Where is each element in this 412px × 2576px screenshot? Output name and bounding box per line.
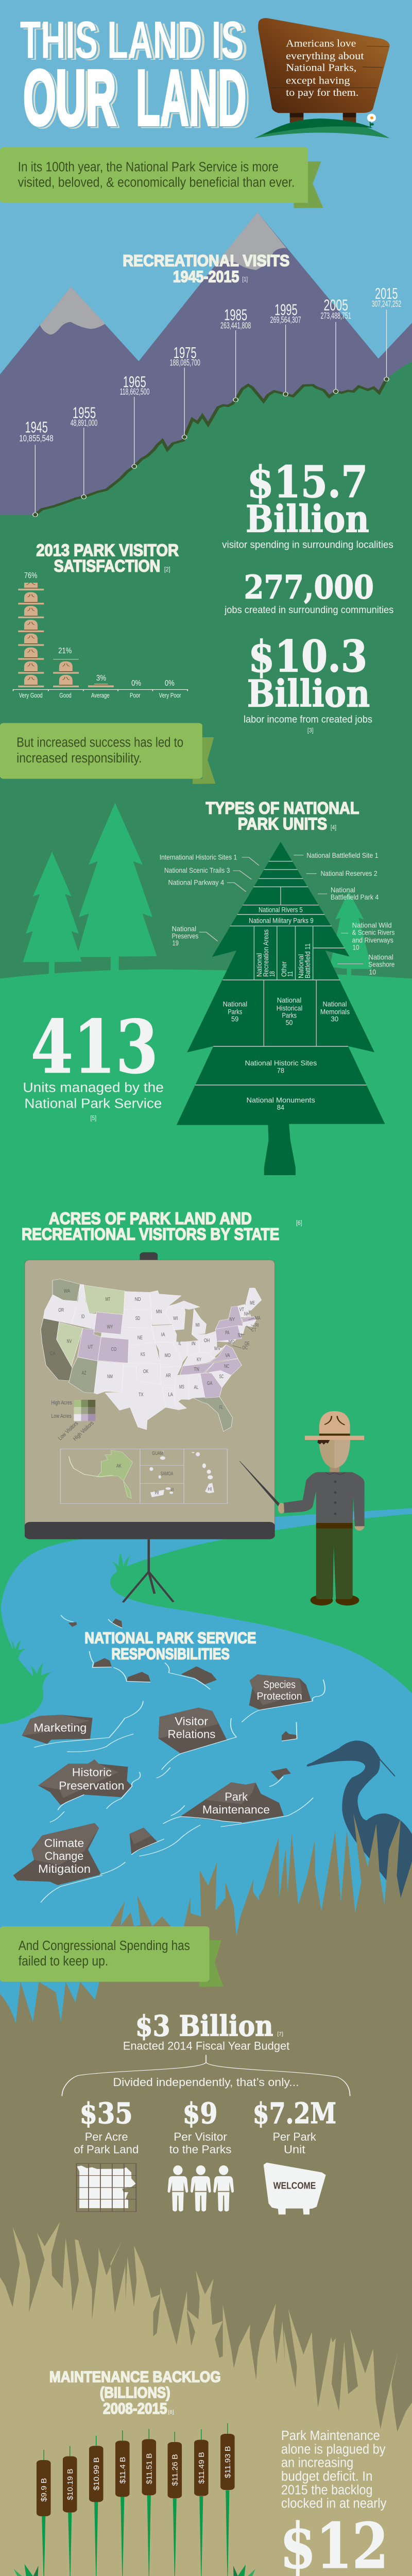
chart: 2013 park visitor satisfaction: Average bbox=[91, 691, 110, 699]
chart: 2013 park visitor satisfaction: [2] bbox=[164, 566, 170, 573]
line chart: recreational visits 1945-2015: 263,441,808 bbox=[220, 320, 251, 330]
map insets: Alaska, Guam, Samoa, Puerto Rico, Hawaii: HI bbox=[208, 1486, 212, 1492]
illustration: heron bbox=[306, 1740, 412, 1913]
heading: acres of park land bbox=[22, 1209, 302, 1244]
chart: 2013 park visitor satisfaction: SATISFACTION bbox=[54, 556, 160, 575]
stat: 3 billion budget: $3 Billion bbox=[135, 2009, 273, 2043]
choropleth map of US states: FL bbox=[219, 1404, 223, 1410]
chart: 2013 park visitor satisfaction: Very Good bbox=[19, 691, 43, 699]
cattail value labels: $10.19 B bbox=[66, 2469, 75, 2500]
heading: types of national park units: PARK UNITS bbox=[238, 815, 327, 833]
chart: types of national park units tree: National Historic Sites bbox=[245, 1059, 317, 1067]
choropleth map of US states: WY bbox=[107, 1324, 113, 1330]
rock: marketing: Marketing bbox=[33, 1722, 87, 1734]
chart: types of national park units tree: 84 bbox=[277, 1104, 284, 1111]
chart: cattail bar chart of maintenance backlog bbox=[5, 2423, 264, 2576]
choropleth map of US states: TX bbox=[139, 1392, 144, 1397]
cattail value labels: $11.4 B bbox=[118, 2457, 127, 2484]
background: grass tufts on river bank bbox=[10, 1639, 52, 1688]
map insets: Alaska, Guam, Samoa, Puerto Rico, Hawaii: VI bbox=[171, 1486, 174, 1493]
banner: intro bbox=[0, 147, 323, 208]
budget breakdown: Per Park bbox=[273, 2131, 316, 2143]
chart: types of national park units tree: National Rivers 5 bbox=[259, 906, 303, 914]
rock: marketing bbox=[22, 1701, 143, 1752]
dark green tree treemap bbox=[177, 842, 385, 1175]
callout labels around tree: National bbox=[331, 886, 355, 894]
choropleth map of US states: SC bbox=[219, 1374, 224, 1379]
choropleth map of US states: NE bbox=[138, 1334, 143, 1341]
line chart: recreational visits 1945-2015: 1955 bbox=[73, 404, 96, 422]
line chart: recreational visits 1945-2015: 1985 bbox=[224, 307, 247, 324]
choropleth map of US states: VT bbox=[239, 1307, 244, 1312]
background: sky bbox=[0, 0, 412, 567]
projector screen with map bbox=[25, 1252, 275, 1602]
illustration: purple mountains with snow caps bbox=[0, 212, 412, 543]
background: pine trees behind unit tree bbox=[23, 803, 372, 975]
rock: species protection bbox=[242, 1674, 325, 1722]
choropleth map of US states: LA bbox=[168, 1392, 173, 1397]
rock: climate change mitigation bbox=[13, 1823, 125, 1903]
map insets: Alaska, Guam, Samoa, Puerto Rico, Hawaii: AK bbox=[116, 1463, 122, 1469]
budget breakdown: to the Parks bbox=[169, 2143, 231, 2156]
banner: congressional spending bbox=[0, 1926, 224, 1987]
choropleth map of US states: WA bbox=[64, 1288, 70, 1294]
choropleth map of US states: IN bbox=[192, 1341, 196, 1346]
choropleth map of US states: UT bbox=[88, 1344, 93, 1350]
rock: species protection: Protection bbox=[256, 1691, 302, 1702]
choropleth map of US states: NV bbox=[67, 1338, 72, 1344]
chart: types of national park units tree: Parks bbox=[282, 1011, 297, 1020]
rotated unit labels: 11 bbox=[286, 971, 294, 977]
rock: climate change mitigation: Mitigation bbox=[38, 1863, 91, 1875]
chart: types of national park units tree: National Military Parks 9 bbox=[249, 917, 314, 925]
choropleth map of US states: CA bbox=[50, 1350, 56, 1356]
brace bbox=[62, 2055, 350, 2096]
heading: maintenance backlog: (BILLIONS) bbox=[100, 2384, 170, 2401]
heading: maintenance backlog bbox=[49, 2369, 221, 2417]
chart: types of national park units tree: 30 bbox=[331, 1015, 338, 1023]
heading: recreational visits: 1945-2015 bbox=[173, 267, 239, 285]
choropleth map of US states: MO bbox=[165, 1352, 170, 1358]
heading: maintenance backlog: [8] bbox=[168, 2409, 174, 2415]
budget breakdown: $7.2M bbox=[253, 2096, 336, 2130]
background: tan foreground grass bbox=[0, 2222, 412, 2576]
legend axis labels: High Visitors bbox=[72, 1420, 95, 1442]
stat: 3 billion budget: [7] bbox=[277, 2031, 283, 2037]
line chart: recreational visits 1945-2015: 188,085,700 bbox=[170, 357, 200, 367]
rock: park maintenance: Maintenance bbox=[202, 1804, 270, 1816]
heading: responsibilities: NATIONAL PARK SERVICE bbox=[84, 1629, 256, 1647]
budget breakdown: Per Visitor bbox=[174, 2131, 227, 2143]
chart: 2013 park visitor satisfaction: Good bbox=[59, 691, 72, 699]
choropleth map of US states bbox=[41, 1279, 262, 1431]
heading: acres of park land: ACRES OF PARK LAND AND bbox=[49, 1209, 252, 1228]
choropleth map of US states: NY bbox=[229, 1316, 235, 1322]
stat: jobs and labor income: [3] bbox=[307, 727, 314, 734]
rock: historic preservation: Historic bbox=[72, 1766, 112, 1779]
stat: 413 units: 413 bbox=[31, 1004, 158, 1090]
legend axis labels: Low Visitors bbox=[57, 1420, 79, 1442]
chart: types of national park units tree: National bbox=[223, 1000, 247, 1008]
chart: 2013 park visitor satisfaction: 0% bbox=[165, 679, 175, 688]
heading: acres of park land: [6] bbox=[296, 1219, 302, 1226]
section: national park service responsibilities bbox=[22, 1615, 325, 1856]
line chart: recreational visits 1945-2015: 118,662,500 bbox=[120, 386, 149, 397]
rock: park maintenance bbox=[163, 1782, 313, 1827]
rock: visitor relations: Relations bbox=[168, 1728, 215, 1741]
heading: responsibilities bbox=[84, 1629, 256, 1663]
background: bright green hill bbox=[0, 970, 412, 1748]
wooden sign callout: everything about bbox=[286, 50, 364, 62]
callout labels around tree: Battlefield Park 4 bbox=[331, 893, 379, 901]
budget breakdown: Divided independently, that’s only... bbox=[113, 2076, 299, 2089]
choropleth map of US states: OR bbox=[58, 1307, 64, 1313]
stat: 3 billion budget bbox=[123, 2009, 289, 2053]
stat: 413 units bbox=[23, 1004, 164, 1122]
line chart: recreational visits 1945-2015 bbox=[19, 285, 401, 517]
banner: increased responsibility bbox=[0, 723, 215, 784]
chart: types of national park units tree: Parks bbox=[228, 1008, 242, 1015]
callout labels around tree: National Scenic Trails 3 bbox=[164, 867, 230, 874]
choropleth map of US states: VA bbox=[225, 1352, 230, 1358]
cattail value labels: $11.26 B bbox=[171, 2454, 179, 2486]
rotated unit labels: Other bbox=[280, 961, 288, 977]
chart: 2013 park visitor satisfaction: 76% bbox=[24, 571, 37, 580]
callout labels around tree: 19 bbox=[173, 939, 179, 947]
chart: types of national park units tree: 50 bbox=[286, 1019, 293, 1026]
choropleth map of US states: NM bbox=[107, 1374, 113, 1379]
chart: 2013 park visitor satisfaction: 0% bbox=[131, 679, 141, 688]
budget breakdown bbox=[62, 2009, 350, 2214]
choropleth map of US states: CT bbox=[251, 1327, 256, 1333]
chart: 2013 park visitor satisfaction: Poor bbox=[130, 691, 141, 699]
background: olive ground with reeds bbox=[0, 1814, 412, 2576]
line chart: recreational visits 1945-2015: 273,488,751 bbox=[320, 310, 351, 320]
chart: types of national park units tree: National bbox=[277, 996, 301, 1004]
choropleth map of US states: TN bbox=[194, 1366, 199, 1372]
banner: congressional spending: And Congressional Spending has bbox=[19, 1939, 190, 1953]
callout labels around tree bbox=[160, 852, 394, 976]
chart: types of national park units tree: National Monuments bbox=[247, 1096, 315, 1104]
stat: 3 billion budget: Enacted 2014 Fiscal Year Budget bbox=[123, 2040, 289, 2053]
choropleth map of US states: CO bbox=[111, 1346, 116, 1352]
rock: park maintenance: Park bbox=[225, 1791, 248, 1803]
line chart: recreational visits 1945-2015: 1945 bbox=[25, 419, 48, 436]
callout labels around tree: International Historic Sites 1 bbox=[160, 853, 237, 861]
line chart: recreational visits 1945-2015: 1975 bbox=[174, 345, 197, 362]
rock: historic preservation: Preservation bbox=[59, 1780, 124, 1792]
title bbox=[20, 11, 250, 144]
rock: species protection: Species bbox=[263, 1680, 296, 1690]
icon: welcome sign bbox=[264, 2163, 326, 2214]
chart: types of national park units tree: Memorials bbox=[320, 1008, 350, 1015]
choropleth map of US states: NH bbox=[244, 1311, 250, 1317]
heading: types of national park units: [4] bbox=[331, 824, 336, 831]
rotated unit labels: National bbox=[297, 954, 305, 978]
choropleth map of US states: ME bbox=[250, 1300, 255, 1306]
map legend bbox=[51, 1400, 95, 1421]
stat: visitor spending bbox=[222, 456, 393, 550]
cattail value labels: $11.49 B bbox=[197, 2452, 206, 2484]
chart: types of national park units tree: 78 bbox=[277, 1066, 284, 1075]
small decorative rocks bbox=[61, 1615, 297, 1856]
heading: types of national park units bbox=[205, 799, 359, 833]
choropleth map of US states: KS bbox=[141, 1351, 145, 1357]
banner: increased responsibility: But increased success has led to bbox=[16, 735, 183, 750]
reed tufts bbox=[5, 2564, 264, 2576]
rock: climate change mitigation: Climate bbox=[44, 1837, 84, 1850]
choropleth map of US states: MI bbox=[196, 1322, 200, 1328]
legend axis labels bbox=[57, 1420, 95, 1442]
chart: 2013 park visitor satisfaction: Very Poor bbox=[159, 691, 181, 699]
choropleth map of US states: MA bbox=[255, 1315, 261, 1321]
callout labels around tree: 10 bbox=[353, 943, 359, 951]
budget breakdown: $9 bbox=[183, 2096, 217, 2130]
choropleth map of US states: PA bbox=[225, 1330, 230, 1335]
choropleth map of US states: MT bbox=[106, 1296, 110, 1302]
choropleth map of US states: ND bbox=[135, 1296, 141, 1302]
choropleth map of US states: MS bbox=[179, 1384, 184, 1389]
budget breakdown: Unit bbox=[284, 2143, 305, 2156]
wooden sign callout bbox=[254, 18, 390, 138]
text and stat: 12 billion backlog: an increasing bbox=[281, 2455, 353, 2470]
callout labels around tree: 10 bbox=[369, 968, 376, 976]
cattail value labels: $9.9 B bbox=[40, 2478, 48, 2502]
banner: congressional spending: failed to keep up. bbox=[19, 1954, 108, 1969]
title: OUR bbox=[23, 55, 116, 141]
cattail stems and heads bbox=[37, 2423, 235, 2576]
line chart: recreational visits 1945-2015: 1965 bbox=[123, 374, 146, 391]
budget breakdown: of Park Land bbox=[74, 2143, 139, 2156]
cattail value labels: $11.51 B bbox=[145, 2453, 153, 2484]
background: green hill under visits line bbox=[0, 362, 412, 1127]
icon: three visitors bbox=[168, 2165, 234, 2211]
rotated unit labels: National bbox=[255, 953, 263, 977]
cattail value labels: $10.99 B bbox=[92, 2457, 101, 2490]
wooden sign callout: except having bbox=[286, 75, 350, 86]
choropleth map of US states: AR bbox=[166, 1372, 171, 1378]
choropleth map of US states: OH bbox=[204, 1337, 210, 1343]
rock: historic preservation bbox=[38, 1759, 140, 1822]
heading: recreational visits: [1] bbox=[242, 276, 248, 283]
choropleth map of US states: IA bbox=[161, 1331, 165, 1337]
stat: jobs and labor income bbox=[224, 569, 393, 734]
callout labels around tree: National Parkway 4 bbox=[168, 878, 224, 886]
rotated unit labels bbox=[255, 929, 312, 978]
heading: maintenance backlog: 2008-2015 bbox=[103, 2400, 167, 2417]
budget breakdown: $35 bbox=[80, 2096, 133, 2130]
chart: 2013 park visitor satisfaction: 2013 PARK VISITOR bbox=[36, 541, 179, 560]
choropleth map of US states: NJ bbox=[238, 1332, 242, 1338]
rock: climate change mitigation: Change bbox=[45, 1850, 83, 1862]
choropleth map of US states: ID bbox=[81, 1313, 84, 1319]
cattail value labels: $11.93 B bbox=[224, 2446, 232, 2478]
line chart: recreational visits 1945-2015: 10,855,548 bbox=[19, 433, 54, 444]
choropleth map of US states: IL bbox=[178, 1340, 181, 1346]
stat: 413 units: [5] bbox=[91, 1115, 96, 1122]
title: OUR bbox=[25, 56, 117, 142]
banner: increased responsibility: increased responsibility. bbox=[16, 751, 142, 766]
chart: types of national park units tree: Historical bbox=[277, 1004, 302, 1012]
chart: types of national park units tree: National bbox=[323, 1000, 347, 1008]
choropleth map of US states: DC bbox=[243, 1345, 248, 1350]
chart: 2013 park visitor satisfaction: 3% bbox=[96, 673, 106, 683]
chart: types of national park units tree bbox=[160, 799, 394, 1175]
line chart: recreational visits 1945-2015: 1995 bbox=[274, 301, 298, 319]
rotated unit labels: Recreation Areas bbox=[262, 929, 270, 977]
stat: 413 units: National Park Service bbox=[24, 1096, 162, 1111]
wooden sign callout: to pay for them. bbox=[286, 87, 358, 98]
illustration: park ranger pointing bbox=[239, 1411, 365, 1605]
choropleth map of US states: MN bbox=[156, 1309, 162, 1314]
map insets: Alaska, Guam, Samoa, Puerto Rico, Hawaii bbox=[60, 1449, 227, 1503]
map legend: High Acres bbox=[51, 1400, 72, 1406]
chart: 2013 park visitor satisfaction bbox=[13, 541, 187, 699]
icon: welcome sign: WELCOME bbox=[273, 2180, 316, 2191]
choropleth map of US states: WI bbox=[173, 1315, 178, 1321]
choropleth map of US states: RI bbox=[255, 1322, 259, 1328]
choropleth map of US states: MD bbox=[229, 1338, 234, 1345]
chart: types of national park units tree: 59 bbox=[231, 1015, 238, 1023]
chart: 2013 park visitor satisfaction: 21% bbox=[58, 646, 72, 655]
heading: recreational visits: RECREATIONAL VISITS bbox=[123, 251, 289, 270]
stat: 413 units: Units managed by the bbox=[23, 1080, 164, 1095]
text and stat: 12 billion backlog bbox=[279, 2429, 389, 2576]
title: OUR bbox=[26, 56, 119, 143]
rotated unit labels: Battlefield 11 bbox=[304, 943, 312, 978]
choropleth map of US states: GA bbox=[207, 1380, 212, 1386]
callout labels around tree: Preserves bbox=[172, 932, 198, 940]
choropleth map of US states: OK bbox=[143, 1368, 148, 1374]
choropleth map of US states: SD bbox=[135, 1315, 140, 1321]
line chart: recreational visits 1945-2015: 2005 bbox=[324, 297, 348, 314]
choropleth map of US states: DE bbox=[245, 1341, 250, 1346]
choropleth map of US states: WV bbox=[214, 1345, 220, 1351]
choropleth map of US states: AZ bbox=[82, 1370, 86, 1376]
line chart: recreational visits 1945-2015: 48,891,000 bbox=[71, 417, 97, 428]
budget breakdown: Per Acre bbox=[85, 2131, 128, 2143]
background: river bbox=[0, 1508, 412, 2044]
callout labels around tree: National bbox=[368, 953, 393, 961]
rock: visitor relations bbox=[157, 1707, 236, 1778]
map insets: Alaska, Guam, Samoa, Puerto Rico, Hawaii: GUAM bbox=[152, 1450, 163, 1456]
heading: recreational visits bbox=[123, 251, 289, 285]
callout labels around tree: National bbox=[172, 925, 196, 933]
cattail value labels bbox=[40, 2446, 232, 2502]
heading: maintenance backlog: MAINTENANCE BACKLOG bbox=[49, 2369, 221, 2385]
choropleth map of US states: AL bbox=[194, 1384, 198, 1390]
choropleth map of US states: NC bbox=[224, 1363, 229, 1369]
map insets: Alaska, Guam, Samoa, Puerto Rico, Hawaii: PR bbox=[155, 1490, 159, 1496]
map insets: Alaska, Guam, Samoa, Puerto Rico, Hawaii: SAMOA bbox=[161, 1470, 173, 1477]
wooden sign callout: National Parks, bbox=[286, 62, 356, 73]
heading: responsibilities: RESPONSIBILITIES bbox=[111, 1646, 230, 1663]
icon: land parcel grid bbox=[76, 2163, 136, 2212]
rotated unit labels: 18 bbox=[268, 971, 276, 977]
rock: visitor relations: Visitor bbox=[175, 1715, 208, 1728]
map legend: Low Acres bbox=[51, 1413, 72, 1419]
choropleth map of US states: KY bbox=[197, 1357, 201, 1362]
line chart: recreational visits 1945-2015: 269,564,307 bbox=[270, 314, 301, 325]
wooden sign callout: Americans love bbox=[286, 38, 356, 49]
